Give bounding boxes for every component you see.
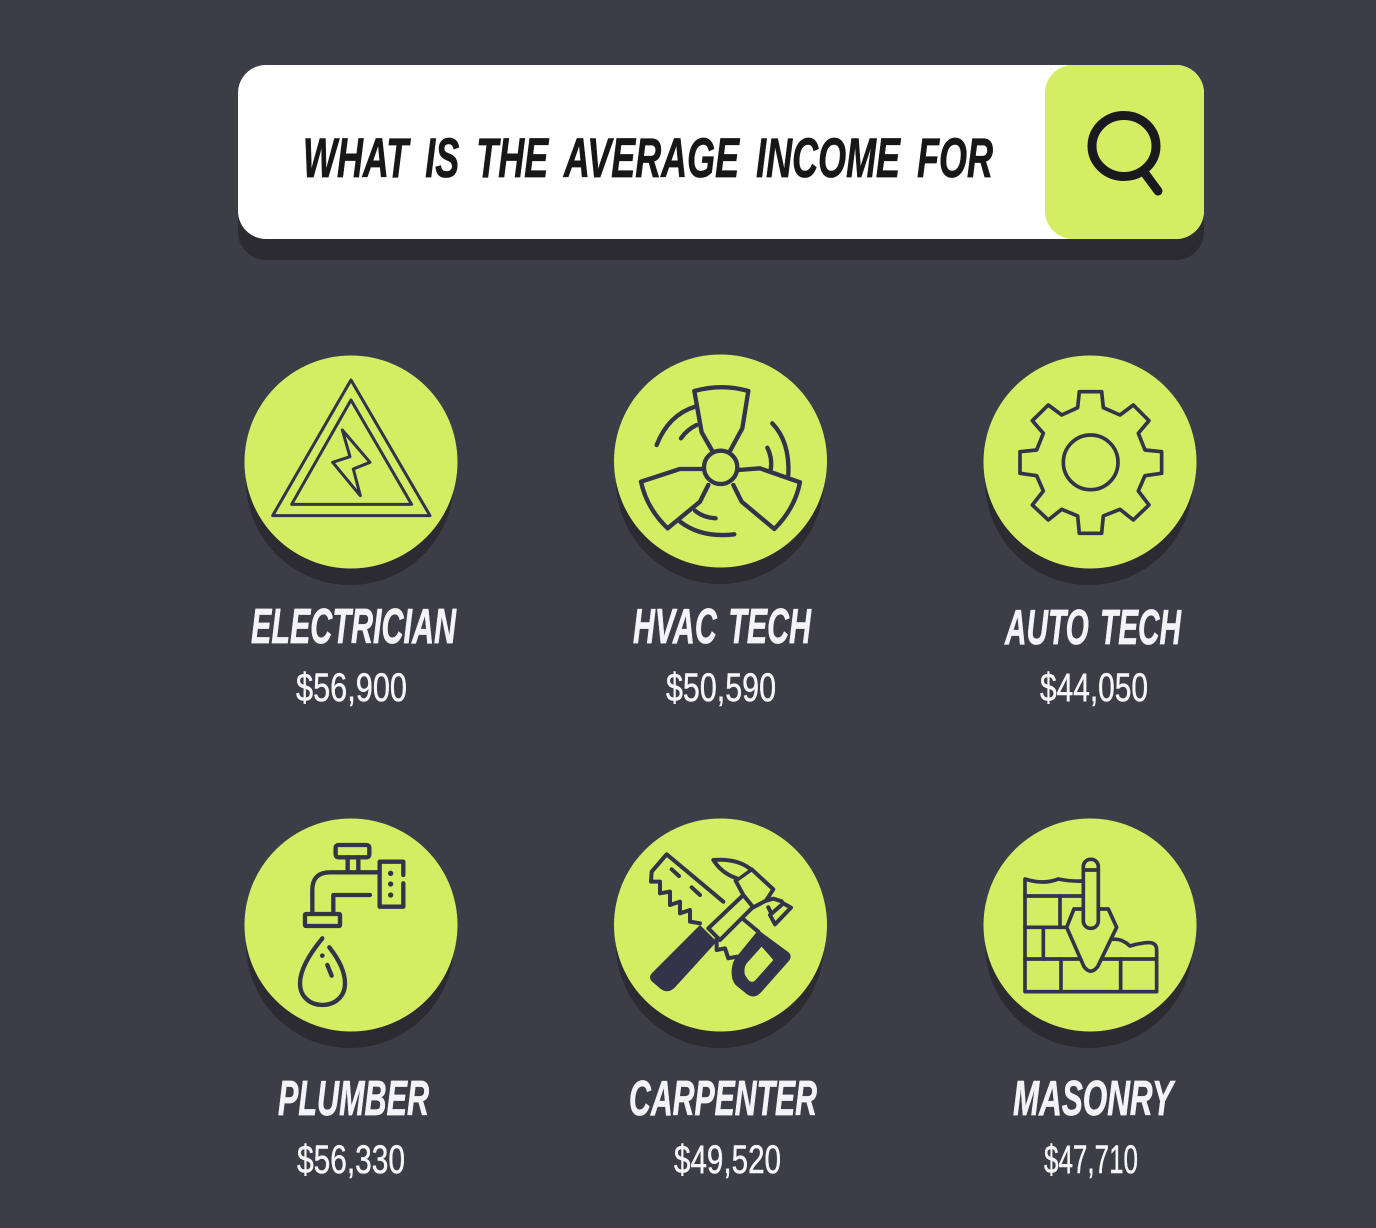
value: electrician income: $56,900 [296, 666, 407, 710]
label: carpenter: CARPENTER [629, 1072, 817, 1126]
value: masonry income: $47,710 [1044, 1138, 1138, 1182]
card: hvac tech [614, 354, 827, 710]
value: hvac tech income: $50,590 [666, 666, 776, 710]
search bar [238, 65, 1204, 260]
icon: electrical hazard triangle [244, 356, 458, 585]
icon: faucet and drop [244, 818, 458, 1048]
icon: gear [984, 356, 1196, 585]
value: carpenter income: $49,520 [674, 1138, 781, 1182]
label: plumber: PLUMBER [278, 1072, 429, 1126]
value: plumber income: $56,330 [297, 1138, 405, 1182]
card: plumber [244, 818, 458, 1182]
label: masonry: MASONRY [1013, 1072, 1176, 1126]
search button [1045, 65, 1204, 239]
value: auto tech income: $44,050 [1040, 666, 1148, 710]
label: hvac tech: HVAC TECH [633, 600, 812, 654]
card: carpenter [614, 818, 827, 1182]
icon: brick wall and trowel [984, 818, 1196, 1048]
card: masonry [984, 818, 1196, 1182]
label: electrician: ELECTRICIAN [251, 600, 457, 654]
icon: fan [614, 354, 827, 584]
heading: WHAT IS THE AVERAGE INCOME FOR [303, 126, 993, 189]
icon: saw and hammer [614, 818, 827, 1048]
card: auto tech [984, 356, 1196, 710]
label: auto tech: AUTO TECH [1004, 601, 1182, 655]
card: electrician [244, 356, 458, 710]
icon: magnifying glass [1092, 116, 1158, 191]
